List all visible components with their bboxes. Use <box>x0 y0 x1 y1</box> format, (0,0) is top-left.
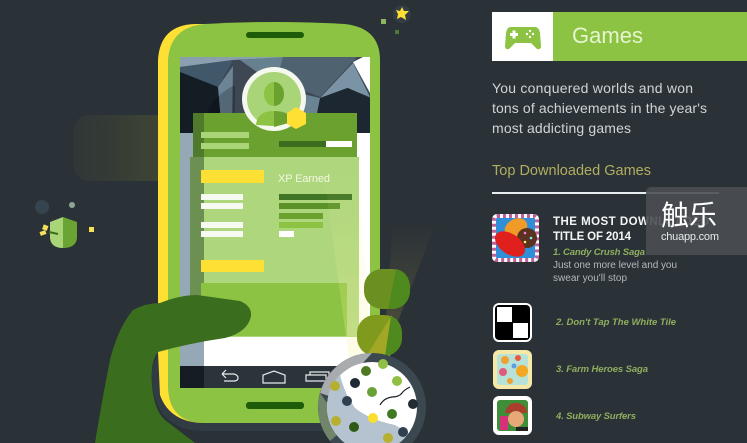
yellow label <box>201 170 264 183</box>
game 1 name: 1. Candy Crush Saga <box>553 247 645 258</box>
dark green profile card <box>193 113 357 157</box>
XP earned label: XP Earned <box>278 173 330 185</box>
phone body <box>168 22 380 423</box>
icon: star and sparkles <box>381 5 411 34</box>
game 3 name: 3. Farm Heroes Saga <box>556 364 648 375</box>
phone yellow edge <box>158 24 260 423</box>
light beam from ball <box>383 220 437 360</box>
icon: subway surfers <box>493 396 532 435</box>
shadow below phone <box>152 352 340 431</box>
intro text <box>492 80 707 136</box>
featured title <box>553 216 709 243</box>
game 2 name: 2. Don't Tap The White Tile <box>555 317 677 328</box>
hand <box>95 295 251 443</box>
game ball <box>318 353 426 443</box>
low poly banner <box>180 57 370 133</box>
blurred glow behind phone <box>73 115 183 181</box>
navigation bar <box>180 366 370 388</box>
progress bar <box>279 141 352 147</box>
header band <box>553 12 747 61</box>
watermark: chuapp.com <box>661 231 719 243</box>
heading: Games: Games <box>572 23 643 48</box>
watermark <box>646 187 747 255</box>
featured title: TITLE OF 2014 <box>553 231 632 243</box>
yellow hexagon badge <box>287 107 306 129</box>
light beam over screen <box>322 160 370 366</box>
top speaker <box>246 32 304 38</box>
white stat lines <box>201 194 243 237</box>
screen left stripe <box>180 133 204 367</box>
game 1 description: Just one more level and you <box>553 260 677 271</box>
light green content panel <box>190 157 359 337</box>
intro text: most addicting games <box>492 120 631 136</box>
nav icon: recents <box>306 372 329 381</box>
card lines <box>201 132 249 149</box>
subheading: top downloaded games: Top Downloaded Games <box>492 163 651 179</box>
floating blob upper <box>364 269 410 309</box>
panel left shadow <box>190 157 204 337</box>
game 1 description: swear you'll stop <box>553 273 627 284</box>
card shadow <box>193 113 204 157</box>
divider <box>492 192 719 194</box>
ball dots <box>330 359 418 443</box>
game 4 name: 4. Subway Surfers <box>555 411 636 422</box>
ball crack <box>380 387 410 405</box>
icon: don't tap the white tile <box>493 303 532 342</box>
intro text: tons of achievements in the year's <box>492 100 707 116</box>
screen <box>180 57 370 367</box>
featured title: THE MOST DOWNLOADED <box>553 216 709 228</box>
avatar <box>242 67 306 131</box>
nav icon: home <box>263 371 285 383</box>
header icon tile <box>492 12 553 61</box>
floating blob lower <box>357 315 402 356</box>
icon: game controller <box>505 27 541 49</box>
bottom speaker <box>246 402 304 409</box>
icon: candy crush saga <box>490 214 537 262</box>
intro text: You conquered worlds and won <box>492 80 693 96</box>
watermark: 触乐 <box>661 194 717 234</box>
panel lower block <box>201 283 347 336</box>
green stat bars <box>279 194 352 237</box>
nav icon: back <box>222 370 238 381</box>
icon: farm heroes saga <box>493 350 532 389</box>
icon: shield with sparkles <box>35 200 94 248</box>
game 1 description <box>553 260 677 284</box>
phone <box>158 22 380 423</box>
yellow label lower <box>201 260 264 272</box>
